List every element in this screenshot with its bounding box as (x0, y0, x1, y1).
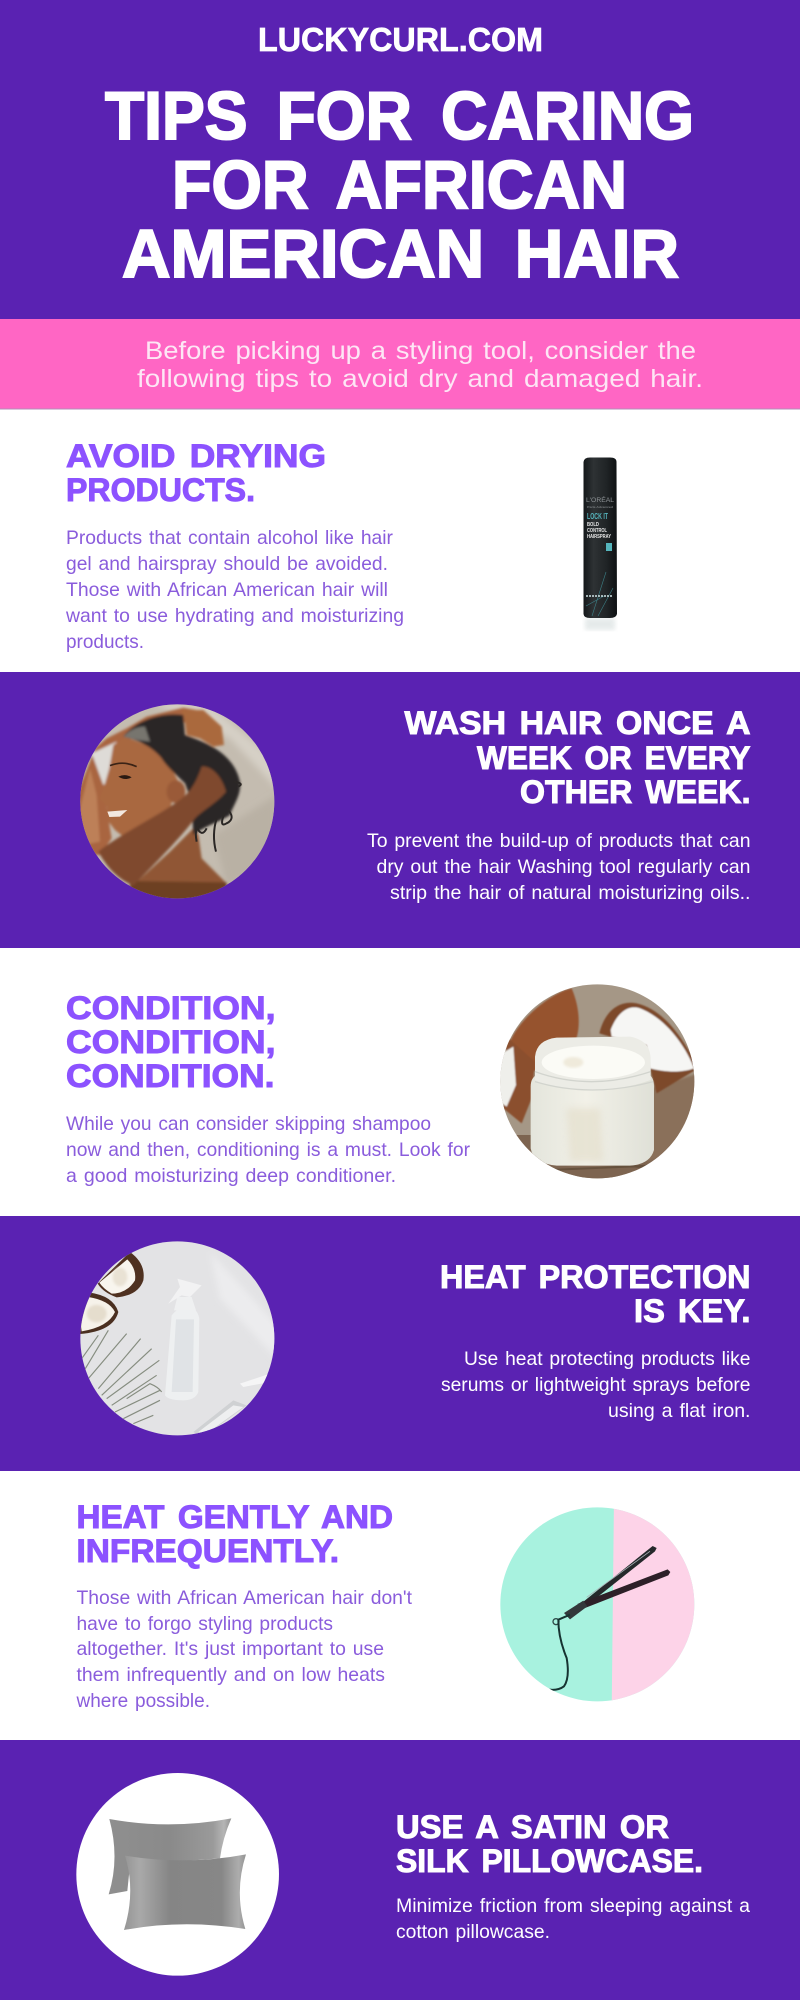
heading: CONDITION, (66, 1024, 276, 1060)
body text: have to forgo styling products (76, 1613, 333, 1635)
photo: spray bottle with coconut (80, 1241, 274, 1436)
icon: hairspray can: HAIRSPRAY (587, 534, 612, 540)
body text: Minimize friction from sleeping against a (396, 1895, 750, 1917)
body text: a good moisturizing deep conditioner. (66, 1165, 396, 1187)
body text: want to use hydrating and moisturizing (65, 605, 404, 627)
heading (76, 1499, 393, 1569)
body text (66, 1113, 470, 1187)
panel: satin pillowcase (0, 1740, 800, 2000)
panel: heat gently (76, 1504, 694, 1711)
heading (396, 1809, 703, 1879)
body text: strip the hair of natural moisturizing oils.. (390, 882, 750, 904)
intro text: Before picking up a styling tool, consider the (145, 337, 696, 365)
panel: condition (66, 984, 694, 1186)
body text: To prevent the build-up of products that can (367, 830, 750, 852)
heading: USE A SATIN OR (396, 1809, 669, 1845)
body text (76, 1587, 413, 1712)
body text: Products that contain alcohol like hair (66, 527, 393, 549)
body text: While you can consider skipping shampoo (66, 1113, 431, 1135)
icon: hairspray can: L'ORÉAL (586, 497, 615, 504)
title: FOR AFRICAN (172, 147, 627, 223)
body text: cotton pillowcase. (396, 1921, 550, 1943)
heading: CONDITION. (66, 1058, 274, 1094)
icon: hairspray can: Paris Advanced (587, 505, 613, 509)
panel: wash hair (0, 672, 800, 948)
body text: using a flat iron. (608, 1400, 750, 1422)
heading: INFREQUENTLY. (76, 1533, 339, 1569)
title: TIPS FOR CARING (105, 78, 694, 154)
icon: hairspray can (584, 458, 617, 630)
heading: CONDITION, (66, 990, 276, 1026)
body text: now and then, conditioning is a must. Look for (66, 1139, 470, 1161)
icon: hairspray can: BOLD (587, 522, 599, 528)
body text: Use heat protecting products like (464, 1348, 750, 1370)
site name: LUCKYCURL.COM (258, 21, 543, 58)
heading (440, 1259, 750, 1329)
heading: WEEK OR EVERY (477, 740, 750, 776)
heading (404, 705, 750, 810)
body text (441, 1348, 750, 1422)
panel: header (0, 0, 800, 319)
photo: woman washing hair (80, 704, 274, 898)
body text (396, 1895, 750, 1943)
title: AMERICAN HAIR (122, 216, 679, 292)
photo: coconut oil jar (500, 984, 694, 1178)
heading: WASH HAIR ONCE A (404, 705, 750, 741)
heading: SILK PILLOWCASE. (396, 1843, 703, 1879)
intro text (137, 337, 703, 393)
icon: hairspray can: CONTROL (587, 528, 607, 534)
panel: avoid drying products (0, 410, 800, 672)
body text (65, 527, 404, 653)
photo: flat iron (500, 1507, 694, 1702)
heading: HEAT GENTLY AND (76, 1499, 393, 1535)
body text: Those with African American hair will (66, 579, 388, 601)
heading (66, 438, 326, 508)
icon: hairspray can: LOCK IT (587, 512, 608, 521)
body text (367, 830, 750, 904)
body text: gel and hairspray should be avoided. (66, 553, 388, 575)
body text: Those with African American hair don't (76, 1587, 413, 1609)
body text: altogether. It's just important to use (76, 1638, 384, 1660)
heading: HEAT PROTECTION (440, 1259, 750, 1295)
heading: OTHER WEEK. (520, 774, 750, 810)
body text: them infrequently and on low heats (76, 1664, 385, 1686)
body text: products. (66, 631, 144, 653)
heading: IS KEY. (634, 1293, 750, 1329)
intro text: following tips to avoid dry and damaged hair. (137, 365, 703, 393)
photo: satin pillowcases (76, 1773, 279, 1976)
body text: where possible. (76, 1690, 210, 1712)
panel: intro banner (0, 319, 800, 410)
title (105, 78, 694, 292)
body text: dry out the hair Washing tool regularly can (376, 856, 750, 878)
heading: AVOID DRYING (66, 438, 326, 474)
panel: heat protection (0, 1216, 800, 1471)
heading: PRODUCTS. (66, 472, 255, 508)
body text: serums or lightweight sprays before (441, 1374, 750, 1396)
heading (66, 990, 276, 1094)
